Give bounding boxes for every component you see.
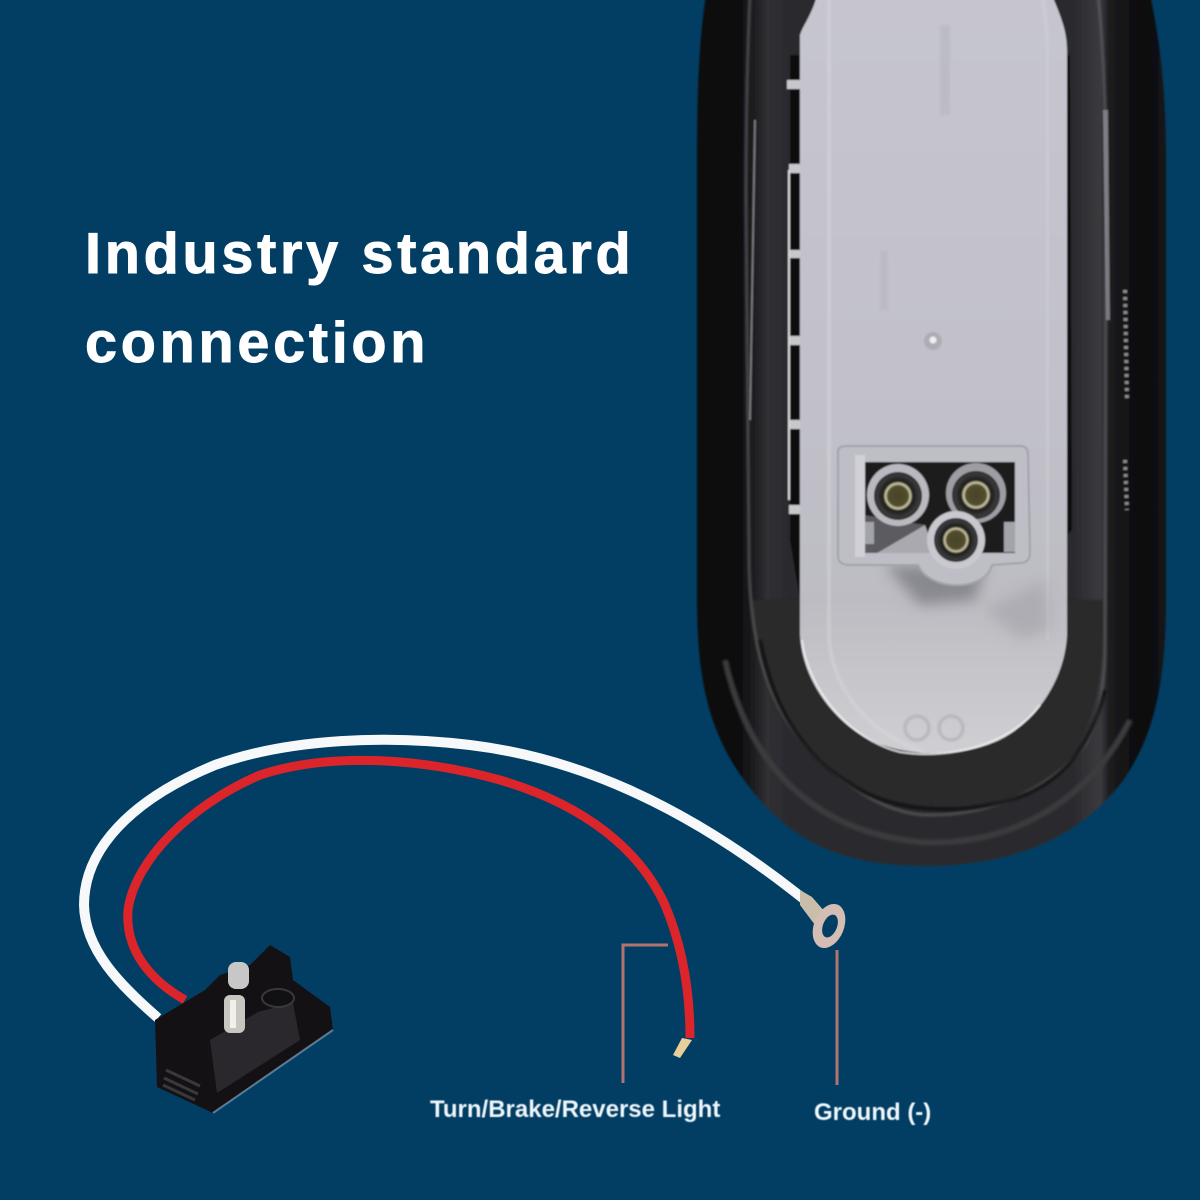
lens dimple: [924, 332, 942, 350]
lens body: [800, 0, 1067, 753]
label: turn/brake/reverse light: Turn/Brake/Reverse Light: [430, 1096, 720, 1123]
title: Industry standard connection: [85, 222, 634, 375]
rubber side imprint: [1125, 290, 1127, 510]
leader line: turn/brake/reverse: [623, 945, 668, 1083]
plug connector: [155, 945, 333, 1113]
leader line: ground: [836, 950, 838, 1085]
connector housing: [838, 446, 1030, 585]
rubber inner ridge: [746, 0, 1106, 815]
wire: red signal wire: [128, 760, 690, 1038]
dark gap with latch tabs: [790, 55, 1072, 600]
product: oval lamp rear view: [697, 0, 1166, 866]
ground ring terminal: [800, 890, 852, 953]
socket pins: [867, 464, 929, 526]
wire tip: stripped copper: [673, 1038, 692, 1058]
connector vent slots: [163, 1070, 200, 1100]
rubber grommet: [697, 0, 1166, 866]
connector metal pins: [224, 962, 249, 1033]
molded recycling marks: [905, 716, 963, 740]
wire: white ground wire: [84, 740, 805, 1018]
connector shadow: [885, 565, 985, 605]
rubber lower band: [752, 600, 1106, 803]
molded faint text: [880, 25, 950, 310]
label: ground: Ground (-): [814, 1099, 931, 1126]
